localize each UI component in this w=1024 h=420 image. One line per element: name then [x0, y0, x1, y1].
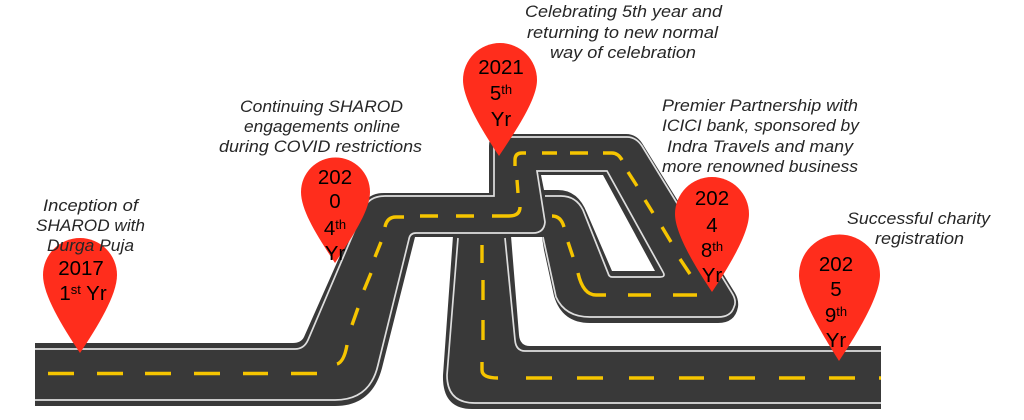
pin: 2024, 8th year: 202 [695, 187, 729, 210]
caption: 2025: Successful charity [847, 209, 992, 228]
pin: 2020, 4th year: 202 [318, 166, 352, 189]
caption: 2021 [525, 2, 723, 62]
caption: 2021: way of celebration [550, 43, 696, 62]
caption: 2020: engagements online [244, 117, 400, 136]
caption: 2025: registration [875, 229, 964, 248]
pin: 2017, 1st year: st [71, 282, 81, 297]
caption: 2024: ICICI bank, sponsored by [662, 116, 861, 135]
caption: 2017: Durga Puja [47, 236, 134, 255]
caption: 2021: returning to new normal [527, 23, 719, 42]
pin: 2020, 4th year: 4 [324, 217, 346, 240]
pin: 2017, 1st year: Yr [81, 282, 107, 305]
pin: 2020, 4th year: 0 [329, 190, 341, 213]
caption: 2017 [36, 196, 145, 255]
caption: 2024 [662, 96, 861, 176]
pin: 2020, 4th year [301, 158, 370, 265]
pin: 2017, 1st year: 2017 [58, 257, 104, 280]
pin: 2024, 8th year [675, 177, 749, 292]
pin: 2024, 8th year: Yr [702, 264, 722, 287]
caption: 2017: Inception of [43, 196, 140, 215]
pin: 2024, 8th year: 4 [706, 214, 718, 237]
caption: 2024: more renowned business [662, 157, 859, 176]
pin: 2025, 9th year: 5 [830, 278, 842, 301]
pin: 2025, 9th year: th [836, 304, 847, 319]
road surface: main section with loop [35, 134, 738, 406]
caption: 2021: Celebrating 5th year and [525, 2, 723, 21]
pin: 2024, 8th year: 8 [701, 239, 723, 262]
pin: 2017, 1st year: 1 [59, 282, 107, 305]
pin: 2021, 5th year: 5 [490, 82, 512, 105]
pin: 2025, 9th year: 9 [825, 304, 847, 327]
pin: 2025, 9th year: Yr [826, 329, 846, 352]
pin: 2020, 4th year: th [335, 217, 346, 232]
road: winding highway [35, 134, 881, 409]
pin: 2021, 5th year: th [501, 82, 512, 97]
pin: 2020, 4th year: Yr [325, 242, 345, 265]
caption: 2024: Premier Partnership with [662, 96, 858, 115]
caption: 2020: during COVID restrictions [219, 137, 423, 156]
caption: 2017: SHAROD with [36, 216, 145, 235]
caption: 2024: Indra Travels and many [667, 137, 855, 156]
pin: 2021, 5th year [463, 43, 537, 156]
pin: 2025, 9th year [799, 234, 880, 361]
pin: 2021, 5th year: Yr [491, 108, 511, 131]
pin: 2017, 1st year [43, 238, 117, 353]
caption: 2020 [219, 97, 423, 156]
pin: 2024, 8th year: th [712, 239, 723, 254]
road surface: lower return section [443, 236, 881, 409]
pin: 2025, 9th year: 202 [819, 253, 853, 276]
pin: 2021, 5th year: 2021 [478, 56, 524, 79]
caption: 2020: Continuing SHAROD [240, 97, 403, 116]
caption: 2025 [847, 209, 992, 248]
road centre line: yellow dashes [48, 153, 881, 378]
